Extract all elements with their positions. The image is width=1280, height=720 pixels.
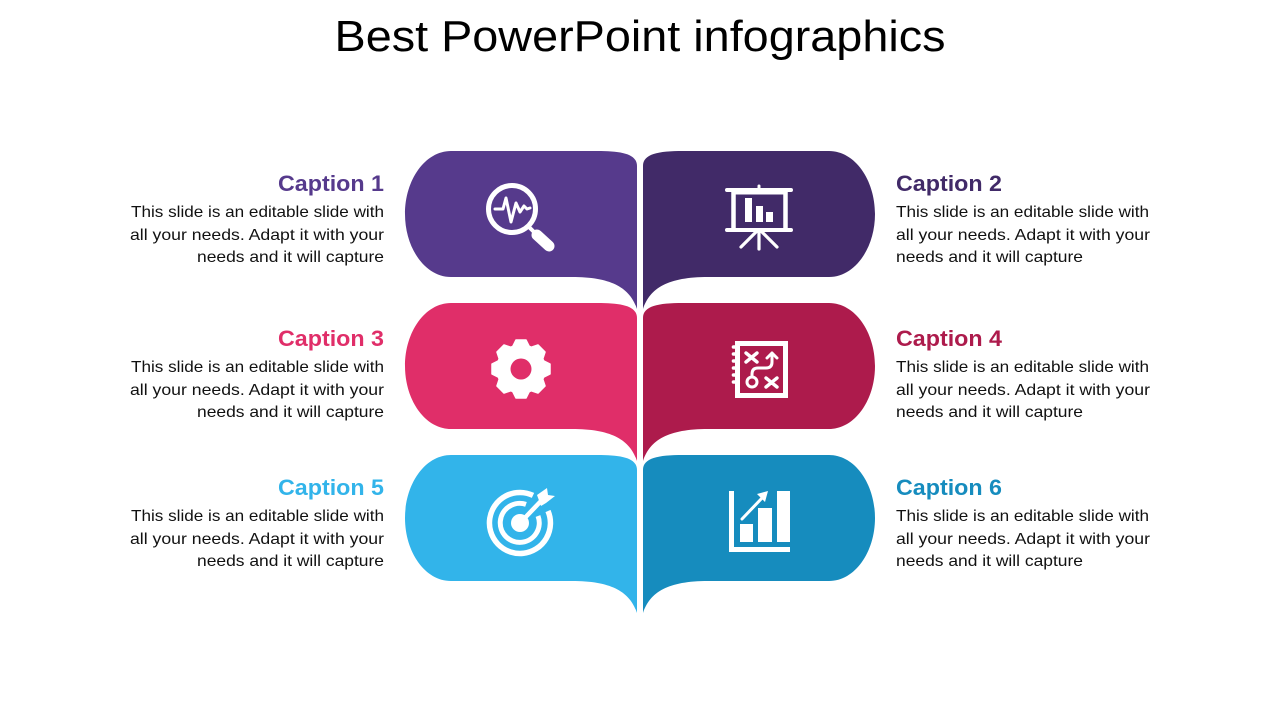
text block: caption 5: Caption 5 bbox=[278, 475, 384, 500]
panel: caption 4 shape bbox=[643, 303, 875, 461]
text block: caption 5: needs and it will capture bbox=[197, 553, 384, 570]
text block: caption 6: This slide is an editable slide with bbox=[896, 508, 1149, 525]
text block: caption 6: all your needs. Adapt it with your bbox=[896, 531, 1151, 548]
text block: caption 3 bbox=[130, 326, 385, 421]
text block: caption 2: all your needs. Adapt it with your bbox=[896, 227, 1151, 244]
text block: caption 1 bbox=[130, 171, 385, 266]
text block: caption 1: This slide is an editable slide with bbox=[131, 204, 384, 221]
text block: caption 3: needs and it will capture bbox=[197, 404, 384, 421]
text block: caption 3: all your needs. Adapt it with your bbox=[130, 382, 385, 399]
icon: growth chart bbox=[729, 491, 790, 552]
text block: caption 2: This slide is an editable slide with bbox=[896, 204, 1149, 221]
text block: caption 4: Caption 4 bbox=[896, 326, 1003, 351]
panel: caption 5 shape bbox=[405, 455, 637, 613]
panel: caption 3 shape bbox=[405, 303, 637, 461]
text block: caption 4: This slide is an editable slide with bbox=[896, 359, 1149, 376]
text block: caption 3: Caption 3 bbox=[278, 326, 384, 351]
text block: caption 5: all your needs. Adapt it with your bbox=[130, 531, 385, 548]
title: Best PowerPoint infographics bbox=[334, 12, 946, 61]
icon: gear bbox=[492, 340, 550, 398]
text block: caption 2: needs and it will capture bbox=[896, 249, 1083, 266]
text block: caption 1: all your needs. Adapt it with your bbox=[130, 227, 385, 244]
text block: caption 4: needs and it will capture bbox=[896, 404, 1083, 421]
text block: caption 4: all your needs. Adapt it with your bbox=[896, 382, 1151, 399]
text block: caption 3: This slide is an editable slide with bbox=[131, 359, 384, 376]
icon: strategy plan bbox=[734, 344, 786, 396]
icon: magnifier with pulse bbox=[488, 186, 549, 246]
text block: caption 6 bbox=[896, 475, 1151, 570]
text block: caption 2 bbox=[896, 171, 1151, 266]
panel: caption 6 shape bbox=[643, 455, 875, 613]
text block: caption 5 bbox=[130, 475, 385, 570]
text block: caption 1: needs and it will capture bbox=[197, 249, 384, 266]
icon: presentation board bbox=[727, 186, 791, 249]
text block: caption 2: Caption 2 bbox=[896, 171, 1002, 196]
text block: caption 6: needs and it will capture bbox=[896, 553, 1083, 570]
panel: caption 2 shape bbox=[643, 151, 875, 309]
text block: caption 6: Caption 6 bbox=[896, 475, 1002, 500]
icon: target with arrow bbox=[489, 488, 555, 553]
text block: caption 4 bbox=[896, 326, 1151, 421]
panel: caption 1 shape bbox=[405, 151, 637, 309]
text block: caption 1: Caption 1 bbox=[278, 171, 384, 196]
text block: caption 5: This slide is an editable slide with bbox=[131, 508, 384, 525]
